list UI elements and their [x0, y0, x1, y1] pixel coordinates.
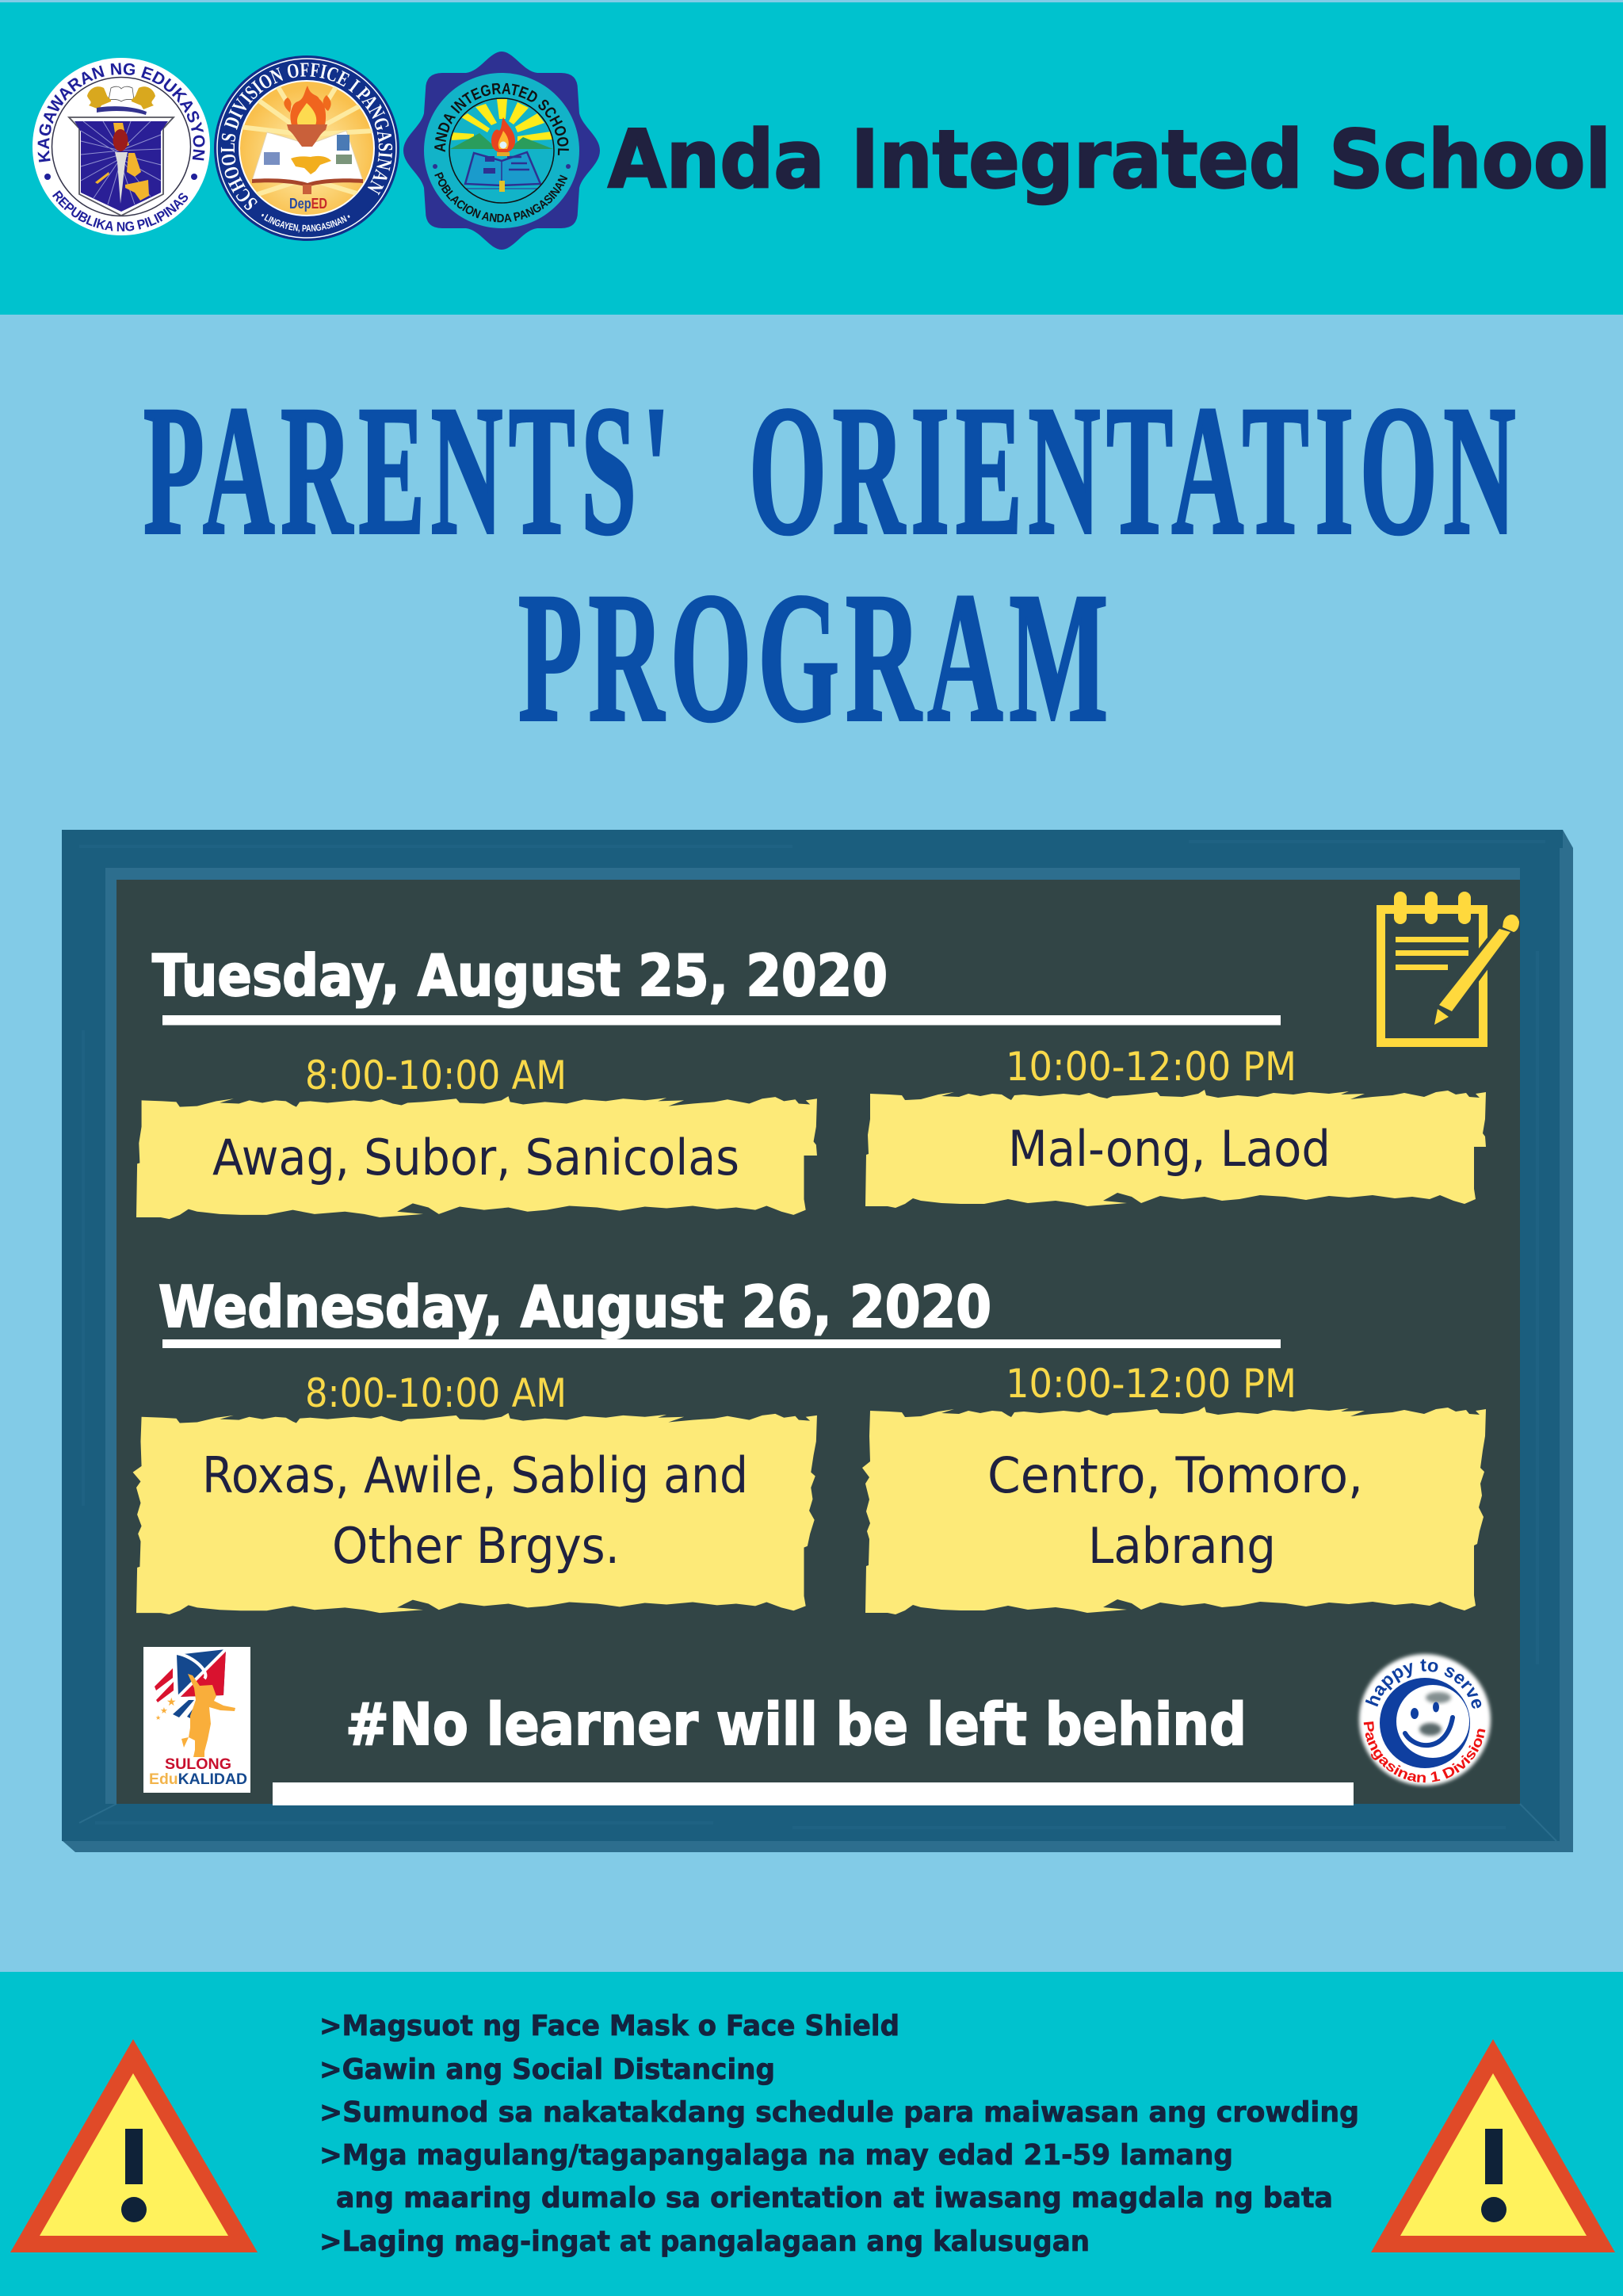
logo: Anda Integrated School seal: ANDA INTEGRATED SCHOOL: [434, 82, 569, 155]
title: PARENTS': [143, 367, 676, 573]
Wednesday 8:00-10:00 AM slot: [133, 1370, 817, 1614]
title: [143, 367, 1522, 760]
logo: happy to serve badge: Pangasinan 1 Division: [1363, 1721, 1485, 1783]
safety reminders list: >Gawin ang Social Distancing: [319, 2053, 775, 2086]
logo: Sulong EduKalidad: EduKALIDAD: [149, 1771, 247, 1788]
title: PROGRAM: [518, 554, 1114, 760]
logo: happy to serve badge: happy to serve: [1365, 1660, 1482, 1709]
logo: Sulong EduKalidad: [143, 1647, 250, 1793]
Wednesday 8:00-10:00 AM slot: Roxas, Awile, Sablig and: [202, 1446, 748, 1504]
logo: Kagawaran ng Edukasyon seal: [32, 58, 210, 235]
safety reminders list: >Laging mag-ingat at pangalagaan ang kalusugan: [319, 2225, 1090, 2258]
Tuesday 8:00-10:00 AM slot: Awag, Subor, Sanicolas: [212, 1129, 739, 1186]
safety reminders list: >Sumunod sa nakatakdang schedule para maiwasan ang crowding: [319, 2096, 1359, 2129]
Tuesday 10:00-12:00 PM slot: [865, 1044, 1486, 1208]
Tuesday 10:00-12:00 PM slot: Mal-ong, Laod: [1008, 1120, 1331, 1178]
safety reminders list: ang maaring dumalo sa orientation at iwasang magdala ng bata: [336, 2182, 1333, 2214]
Wednesday 10:00-12:00 PM slot: 10:00-12:00 PM: [1006, 1361, 1296, 1407]
footer band: [0, 1972, 1623, 2296]
safety reminders list: >Mga magulang/tagapangalaga na may edad 21-59 lamang: [319, 2139, 1233, 2172]
Tuesday 8:00-10:00 AM slot: 8:00-10:00 AM: [305, 1052, 567, 1098]
logo: Sulong EduKalidad: SULONG: [165, 1756, 231, 1773]
logo: Schools Division Office I Pangasinan seal: DepED: [289, 196, 327, 212]
panel: chalkboard schedule: [62, 830, 1573, 1852]
logo: Schools Division Office I Pangasinan seal: • LINGAYEN, PANGASINAN •: [262, 214, 350, 233]
safety reminders list: [319, 2010, 1359, 2258]
logo: Sulong EduKalidad: ★: [166, 1696, 177, 1709]
icon: notepad and pencil: [1381, 892, 1519, 1043]
Wednesday 8:00-10:00 AM slot: Other Brgys.: [332, 1517, 620, 1575]
logo: Schools Division Office I Pangasinan seal: SCHOOLS DIVISION OFFICE I PANGASINAN: [220, 63, 393, 210]
slogan: #No learner will be left behind: [346, 1691, 1247, 1759]
safety reminders list: >Magsuot ng Face Mask o Face Shield: [319, 2010, 899, 2042]
Wednesday 10:00-12:00 PM slot: [862, 1361, 1486, 1614]
logo: Sulong EduKalidad: ★: [155, 1714, 161, 1721]
icon: right warning triangle: [1371, 2039, 1615, 2252]
logo: Kagawaran ng Edukasyon seal: REPUBLIKA NG PILIPINAS: [52, 190, 189, 231]
Tuesday heading: Tuesday, August 25, 2020: [152, 942, 888, 1009]
Wednesday heading: Wednesday, August 26, 2020: [158, 1274, 991, 1340]
logo: Kagawaran ng Edukasyon seal: KAGAWARAN NG EDUKASYON: [38, 63, 204, 162]
logo: Anda Integrated School seal: POBLACION ANDA PANGASINAN: [434, 172, 567, 222]
logo: happy to serve badge: [1356, 1651, 1494, 1789]
Tuesday 8:00-10:00 AM slot: [136, 1052, 817, 1219]
icon: left warning triangle: [10, 2039, 258, 2252]
Wednesday 8:00-10:00 AM slot: 8:00-10:00 AM: [305, 1370, 567, 1416]
Wednesday 10:00-12:00 PM slot: Centro, Tomoro,: [987, 1446, 1363, 1504]
chalkboard wooden frame: [62, 830, 1573, 1852]
header band: [0, 2, 1623, 315]
Wednesday 10:00-12:00 PM slot: Labrang: [1088, 1517, 1276, 1575]
logo: Sulong EduKalidad: ★: [160, 1706, 168, 1716]
logo: Anda Integrated School seal: [403, 52, 600, 250]
Tuesday 10:00-12:00 PM slot: 10:00-12:00 PM: [1006, 1044, 1296, 1090]
